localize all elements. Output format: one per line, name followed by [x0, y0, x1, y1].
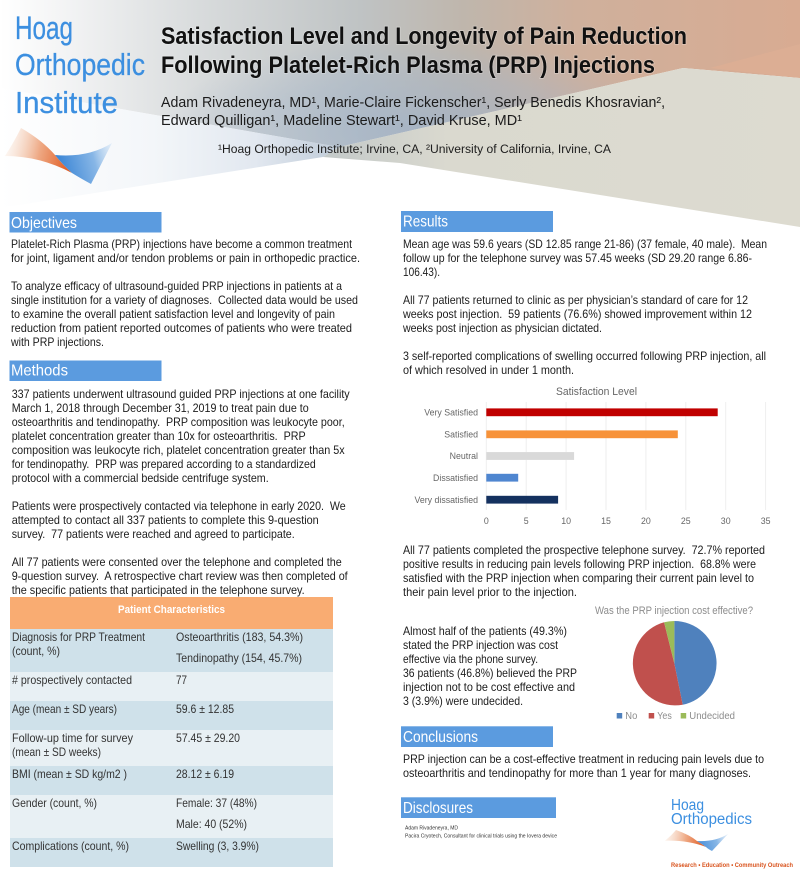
text: results: 3 self-reported complications of swelling occurred following PRP injection, all: [403, 349, 766, 363]
text: conclusions: osteoarthritis and tendinopathy for more than 1 year for many diagnoses.: [403, 766, 751, 780]
bar chart: satisfaction level: 35: [761, 516, 771, 526]
heading: Disclosures: [401, 797, 556, 818]
text: cost effectiveness: Almost half of the patients (49.3%): [403, 624, 567, 638]
text: objectives: reduction from patient reported outcomes of patients who were treated: [11, 321, 352, 335]
heading: Objectives: Objectives: [11, 215, 77, 232]
logo: Hoag Orthopedic Institute: Orthopedic: [15, 47, 145, 82]
logo: Hoag Orthopedics: Orthopedics: [671, 811, 752, 828]
table: patient characteristics: 57.45 ± 29.20: [176, 732, 240, 745]
text: methods: osteoarthritis and tendinopathy. PRP composition was leukocyte poor,: [12, 415, 345, 429]
table: patient characteristics: Male: 40 (52%): [176, 818, 247, 831]
logo: Hoag Orthopedics: [665, 797, 793, 869]
heading: Results: [401, 211, 553, 232]
text: methods: survey. 77 patients were reached and agreed to participate.: [12, 527, 295, 541]
table: patient characteristics: Patient Characteristics: [118, 604, 225, 616]
heading: Disclosures: Disclosures: [403, 800, 473, 817]
bar chart: satisfaction level: 5: [524, 516, 529, 526]
text: disclosures: Pacira Cryotech, Consultant for clinical trials using the Iovera device: [405, 834, 557, 840]
table: patient characteristics: Follow-up time for survey: [12, 732, 133, 745]
table: patient characteristics: Complications (count, %): [12, 840, 129, 853]
table: patient characteristics: Osteoarthritis (183, 54.3%): [176, 631, 303, 644]
table: patient characteristics: 77: [176, 674, 187, 687]
text: cost effectiveness: [403, 624, 577, 708]
heading: Results: Results: [403, 214, 448, 230]
header background shapes: [0, 0, 800, 227]
text: objectives: Platelet-Rich Plasma (PRP) injections have become a common treatment: [11, 237, 353, 251]
text: objectives: with PRP injections.: [10, 335, 104, 349]
bar chart: satisfaction level: 20: [641, 516, 651, 526]
text: methods: the specific patients that participated in the telephone survey.: [12, 583, 305, 597]
pie chart: cost effectiveness: Was the PRP injection cost effective?: [595, 605, 753, 617]
bar chart: satisfaction level: 0: [484, 516, 489, 526]
text: cost effectiveness: stated the PRP injection was cost: [403, 638, 559, 652]
text: objectives: for joint, ligament and/or tendon problems or pain in orthopedic practice.: [11, 251, 360, 265]
heading: Methods: Methods: [11, 362, 68, 380]
affiliations: ¹Hoag Orthopedic Institute; Irvine, CA, ²University of California, Irvine, CA: [218, 142, 612, 156]
bar chart: satisfaction level: Very dissatisfied: [414, 495, 478, 505]
bar chart: satisfaction level: Dissatisfied: [433, 473, 478, 483]
bar chart: satisfaction level: 30: [721, 516, 731, 526]
pie chart: cost effectiveness: No: [625, 710, 637, 722]
bar chart: satisfaction level: [414, 386, 771, 526]
pie chart: cost effectiveness: Undecided: [689, 710, 735, 722]
bar chart: satisfaction level: 15: [601, 516, 611, 526]
authors: [161, 95, 665, 129]
text: survey results: All 77 patients completed the prospective telephone survey. 72.7% reported: [403, 543, 765, 557]
heading: Objectives: [10, 212, 162, 232]
table: patient characteristics: Diagnosis for PRP Treatment: [12, 631, 146, 644]
text: results: follow up for the telephone survey was 57.45 weeks (SD 29.20 range 6.86-: [403, 251, 752, 265]
table: patient characteristics: Age (mean ± SD years): [12, 703, 117, 716]
text: conclusions: [403, 752, 764, 780]
text: disclosures: Adam Rivadeneyra, MD: [405, 826, 458, 832]
text: survey results: their pain level prior to the injection.: [403, 585, 577, 599]
table: patient characteristics: Tendinopathy (154, 45.7%): [176, 652, 302, 665]
text: objectives: [10, 237, 360, 349]
title: Satisfaction Level and Longevity of Pain Reduction: [161, 23, 687, 50]
table: patient characteristics: (count, %): [12, 645, 60, 658]
text: methods: for tendinopathy. PRP was prepared according to a standardized: [12, 457, 316, 471]
authors: Edward Quilligan¹, Madeline Stewart¹, David Kruse, MD¹: [161, 113, 522, 129]
logo: Hoag Orthopedics: Hoag: [671, 797, 704, 814]
text: methods: March 1, 2018 through December 31, 2019 to treat pain due to: [12, 401, 309, 415]
text: conclusions: PRP injection can be a cost-effective treatment in reducing pain levels due to: [403, 752, 764, 766]
bar chart: satisfaction level: 25: [681, 516, 691, 526]
pie chart: cost effectiveness: [595, 605, 753, 722]
authors: Adam Rivadeneyra, MD¹, Marie-Claire Fickenscher¹, Serly Benedis Khosravian²,: [161, 95, 665, 111]
table: patient characteristics: [10, 597, 333, 867]
table: patient characteristics: 59.6 ± 12.85: [176, 703, 234, 716]
heading: Conclusions: Conclusions: [403, 729, 478, 746]
text: methods: 9-question survey. A retrospective chart review was then completed of: [12, 569, 348, 583]
table: patient characteristics: BMI (mean ± SD kg/m2 ): [12, 768, 127, 781]
table: patient characteristics: Female: 37 (48%): [176, 797, 257, 810]
bar chart: satisfaction level: Satisfied: [444, 430, 478, 440]
text: methods: attempted to contact all 337 patients to complete this 9-question: [12, 513, 319, 527]
heading: Conclusions: [401, 726, 553, 747]
bar chart: satisfaction level: 10: [561, 516, 571, 526]
text: methods: [12, 387, 350, 597]
logo: Hoag Orthopedic Institute: [5, 10, 145, 184]
table: patient characteristics: Swelling (3, 3.9%): [176, 840, 259, 853]
text: results: of which resolved in under 1 month.: [403, 363, 574, 377]
text: objectives: to examine the overall patient satisfaction level and longevity of pain: [11, 307, 335, 321]
logo: Hoag Orthopedic Institute: Institute: [15, 85, 118, 120]
logo: Hoag Orthopedic Institute: Hoag: [15, 10, 73, 46]
text: results: [402, 237, 767, 377]
bar chart: satisfaction level: Neutral: [450, 451, 478, 461]
text: results: weeks post injection as physician dictated.: [402, 321, 602, 335]
heading: Methods: [10, 360, 162, 381]
text: objectives: To analyze efficacy of ultrasound-guided PRP injections in patients at a: [11, 279, 342, 293]
title: Following Platelet-Rich Plasma (PRP) Injections: [161, 52, 655, 79]
text: methods: platelet concentration greater than 10x for osteoarthritis. PRP: [12, 429, 306, 443]
text: survey results: positive results in reducing pain levels following PRP injection. 68.8% were: [403, 557, 756, 571]
text: disclosures: [405, 826, 557, 840]
table: patient characteristics: (mean ± SD weeks): [12, 746, 101, 759]
pie chart: cost effectiveness: Yes: [657, 710, 672, 722]
text: cost effectiveness: 36 patients (46.8%) believed the PRP: [403, 666, 577, 680]
text: survey results: [403, 543, 765, 599]
text: cost effectiveness: injection not to be cost effective and: [403, 680, 575, 694]
text: objectives: single institution for a variety of diagnoses. Collected data would be used: [11, 293, 358, 307]
text: methods: 337 patients underwent ultrasound guided PRP injections at one facility: [12, 387, 350, 401]
text: methods: Patients were prospectively contacted via telephone in early 2020. We: [12, 499, 346, 513]
text: results: All 77 patients returned to clinic as per physician’s standard of care for 12: [403, 293, 748, 307]
text: cost effectiveness: effective via the phone survey.: [403, 652, 538, 666]
text: results: 106.43).: [403, 265, 440, 279]
text: cost effectiveness: 3 (3.9%) were undecided.: [403, 694, 523, 708]
table: patient characteristics: Gender (count, %): [12, 797, 97, 810]
text: methods: protocol with a commercial bedside centrifuge system.: [12, 471, 269, 485]
title: [161, 23, 687, 79]
text: methods: All 77 patients were consented over the telephone and completed the: [12, 555, 342, 569]
bar chart: satisfaction level: Very Satisfied: [424, 408, 478, 418]
text: results: weeks post injection. 59 patients (76.6%) showed improvement within 12: [402, 307, 752, 321]
table: patient characteristics: # prospectively contacted: [12, 674, 132, 687]
bar chart: satisfaction level: Satisfaction Level: [556, 386, 637, 398]
text: methods: composition was leukocyte rich, platelet concentration greater than 5x: [12, 443, 345, 457]
text: survey results: satisfied with the PRP injection when comparing their current pain level to: [403, 571, 754, 585]
table: patient characteristics: 28.12 ± 6.19: [176, 768, 234, 781]
